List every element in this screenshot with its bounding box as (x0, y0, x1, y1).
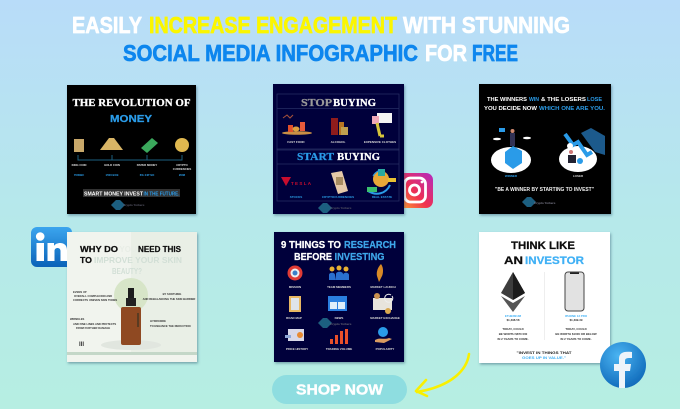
frames (277, 94, 399, 201)
panel: skin beauty (67, 232, 197, 362)
labels: ethereum: TODAY, COULD (502, 327, 524, 331)
heading: think like an investor (504, 240, 584, 267)
callouts: benefits: OVERALL COMPLEXION AND (74, 294, 112, 298)
callouts: benefits: WRINKLES (70, 317, 85, 321)
icon: facebook (600, 342, 646, 388)
labels: start items (290, 195, 392, 199)
icon: linkedin (31, 227, 72, 267)
icons: research topics row two (289, 293, 393, 314)
callouts: benefits: HYDROXIDE (150, 319, 166, 323)
heading: nine things to research: INVESTING (334, 252, 385, 263)
title: FREE (472, 40, 518, 66)
title: SOCIAL MEDIA INFOGRAPHIC (123, 40, 418, 66)
heading: why do you need this: WHY DO (80, 244, 118, 254)
labels: ethereum: BE WORTH $870 000 (499, 332, 528, 336)
heading: winners and losers: YOU DECIDE NOW (484, 106, 537, 112)
labels: money types: GOLD COIN (104, 163, 120, 167)
labels: ethereum: IN 2 YEARS TO COME. (497, 337, 529, 341)
heading: start buying (297, 152, 380, 163)
heading: winners and losers: & THE LOSERS (541, 97, 586, 103)
labels: money types: CURRENCIES (173, 167, 191, 171)
logo: Crypto Yorkers (330, 322, 352, 326)
heading: start buying: BUYING (337, 152, 380, 163)
icons: money evolution (74, 138, 189, 160)
heading: winners and losers: LOSE (587, 97, 602, 103)
logo: Crypto Yorkers (123, 203, 145, 207)
labels: row one: TEAM MEMBERS (327, 285, 351, 289)
icons: start items: TESLA (291, 181, 312, 186)
labels: row one: MARKET LAUNCH (370, 285, 396, 289)
tagline: SMART MONEY INVEST (84, 192, 144, 198)
tagline: GOES UP IN VALUE." (522, 356, 566, 360)
title: FOR (425, 40, 467, 66)
heading: nine things to research (281, 240, 396, 263)
illustration: circle and bottle (101, 278, 161, 350)
panel: winners and losers (479, 84, 611, 214)
tagline: "INVEST IN THINGS THAT (516, 351, 572, 355)
heading: winners and losers (484, 97, 605, 112)
heading: revolution of money (72, 98, 190, 125)
labels: dates: 7000BC (74, 173, 84, 177)
labels: dates (74, 173, 186, 177)
heading: stop buying (301, 98, 376, 109)
heading: think like an investor: THINK LIKE (511, 240, 575, 252)
heading: stop buying: STOP (301, 98, 333, 109)
heading: why do you need this: IMPROVE YOUR SKIN (94, 255, 182, 265)
labels: dates: 6% 44P SO (140, 173, 155, 177)
heading: stop buying: BUYING (333, 98, 376, 109)
labels: row two (286, 316, 400, 320)
heading: nine things to research: 9 THINGS TO (281, 240, 341, 251)
title (72, 12, 570, 66)
labels: iphone: BE WORTH $1000 OR BELOW (555, 332, 597, 336)
logo: Crypto Yorkers (534, 201, 556, 205)
heading: think like an investor: AN (504, 255, 523, 267)
title: WITH STUNNING (403, 12, 570, 38)
labels: row two: MARKET EXCHANGE (370, 316, 400, 320)
callouts: benefits: TO ENHANCE THE REDUCTION (150, 324, 191, 328)
labels: stop items: FAST FOOD (287, 140, 305, 144)
callouts: benefits: CORRECTS UNEVEN SKIN TONES (73, 298, 117, 302)
panel: nine things to research (274, 232, 404, 362)
title: INCREASE ENGAGEMENT (149, 12, 397, 38)
button: shop now: SHOP NOW (296, 382, 384, 398)
icon: instagram (396, 173, 433, 208)
labels: ethereum: $1,398.58 (507, 318, 520, 322)
heading: why do you need this: BEAUTY? (112, 266, 142, 276)
panel: think like an investor (479, 232, 610, 363)
labels: money types: CRYPTO (176, 163, 189, 167)
callouts: benefits: AND FINE LINES AND PROTECTS (73, 322, 116, 326)
labels: iphone: $1,399.39 (570, 318, 583, 322)
heading: why do you need this: YOU (120, 244, 136, 254)
icons: research topics row three (285, 327, 392, 344)
labels: row two: ROAD MAP (286, 316, 302, 320)
tagline: "BE A WINNER BY STARTING TO INVEST" (495, 187, 595, 193)
labels: row two: NEWS (335, 316, 343, 320)
icons: stop items (282, 113, 392, 136)
icon: ethereum (501, 272, 525, 312)
labels: row three: TRADING VOLUME (326, 347, 352, 351)
labels: ethereum (497, 314, 529, 341)
arrow (416, 354, 469, 396)
heading: why do you need this: NEED THIS (138, 244, 181, 254)
labels: stop items: EXPENSIVE CLOTHES (364, 140, 396, 144)
title: EASILY (72, 12, 142, 38)
panel: stop buying start buying (273, 84, 404, 214)
label: loser: LOSER (573, 174, 584, 178)
callouts: benefits: EVENS UP (73, 290, 87, 294)
callouts: benefits: BY SOOTHING (163, 292, 181, 296)
heading: why do you need this (80, 244, 182, 276)
heading: think like an investor: INVESTOR (525, 255, 584, 267)
illustration: loser (559, 128, 605, 172)
divider (544, 272, 546, 340)
icons: research topics row one (288, 264, 383, 282)
labels: iphone: IN 2 YEARS TO COME. (560, 337, 592, 341)
label: winner: WINNER (505, 174, 518, 178)
labels: start items: REAL ESTATE (372, 195, 392, 199)
panel: revolution of money (67, 85, 196, 214)
heading: revolution of money: THE REVOLUTION OF (72, 98, 190, 109)
labels: iphone: TODAY, COULD (565, 327, 587, 331)
heading: winners and losers: WHICH ONE ARE YOU. (539, 106, 605, 112)
labels: row three: POPULARITY (376, 347, 394, 351)
heading: why do you need this: TO (80, 255, 92, 265)
tagline (516, 351, 572, 360)
labels: money types: KING COIN (72, 163, 86, 167)
callouts: benefits: AND REBALANCING THE SKIN BARRIER (143, 297, 195, 301)
labels: start items: STOCKS (290, 195, 302, 199)
labels: money types: PAPER MONEY (137, 163, 157, 167)
heading: winners and losers: WIN (529, 97, 539, 103)
illustration: winner (491, 128, 531, 173)
labels: dates: 2008 (179, 173, 186, 177)
labels: row three (286, 347, 394, 351)
callouts: benefits: FROM FURTHER DAMAGE (76, 326, 110, 330)
logo: III (79, 342, 84, 348)
heading: nine things to research: BEFORE (294, 252, 332, 263)
labels: money types (72, 163, 191, 171)
button: shop now (272, 375, 407, 404)
tagline: IN THE FUTURE. (144, 192, 180, 198)
labels: stop items: ALCOHOL (331, 140, 346, 144)
labels: iphone (555, 314, 597, 341)
labels: ethereum: ETHEREUM (505, 314, 522, 318)
heading: revolution of money: MONEY (110, 113, 152, 125)
callouts: benefits (70, 290, 195, 330)
labels: stop items (287, 140, 396, 144)
labels: iphone: IPHONE 13 PRO (565, 314, 588, 318)
icon: phone (565, 272, 584, 311)
labels: row one: MISSION (289, 285, 301, 289)
logo: Crypto Yorkers (330, 206, 352, 210)
heading: winners and losers: THE WINNERS (487, 97, 527, 103)
tagline (83, 189, 180, 198)
heading: start buying: START (297, 152, 334, 163)
labels: row three: PRICE HISTORY (286, 347, 308, 351)
labels: dates: 1500 BCE (106, 173, 119, 177)
labels: start items: CRYPTOCURRENCIES (322, 195, 354, 199)
heading: nine things to research: RESEARCH (344, 240, 396, 251)
labels: row one (289, 285, 396, 289)
